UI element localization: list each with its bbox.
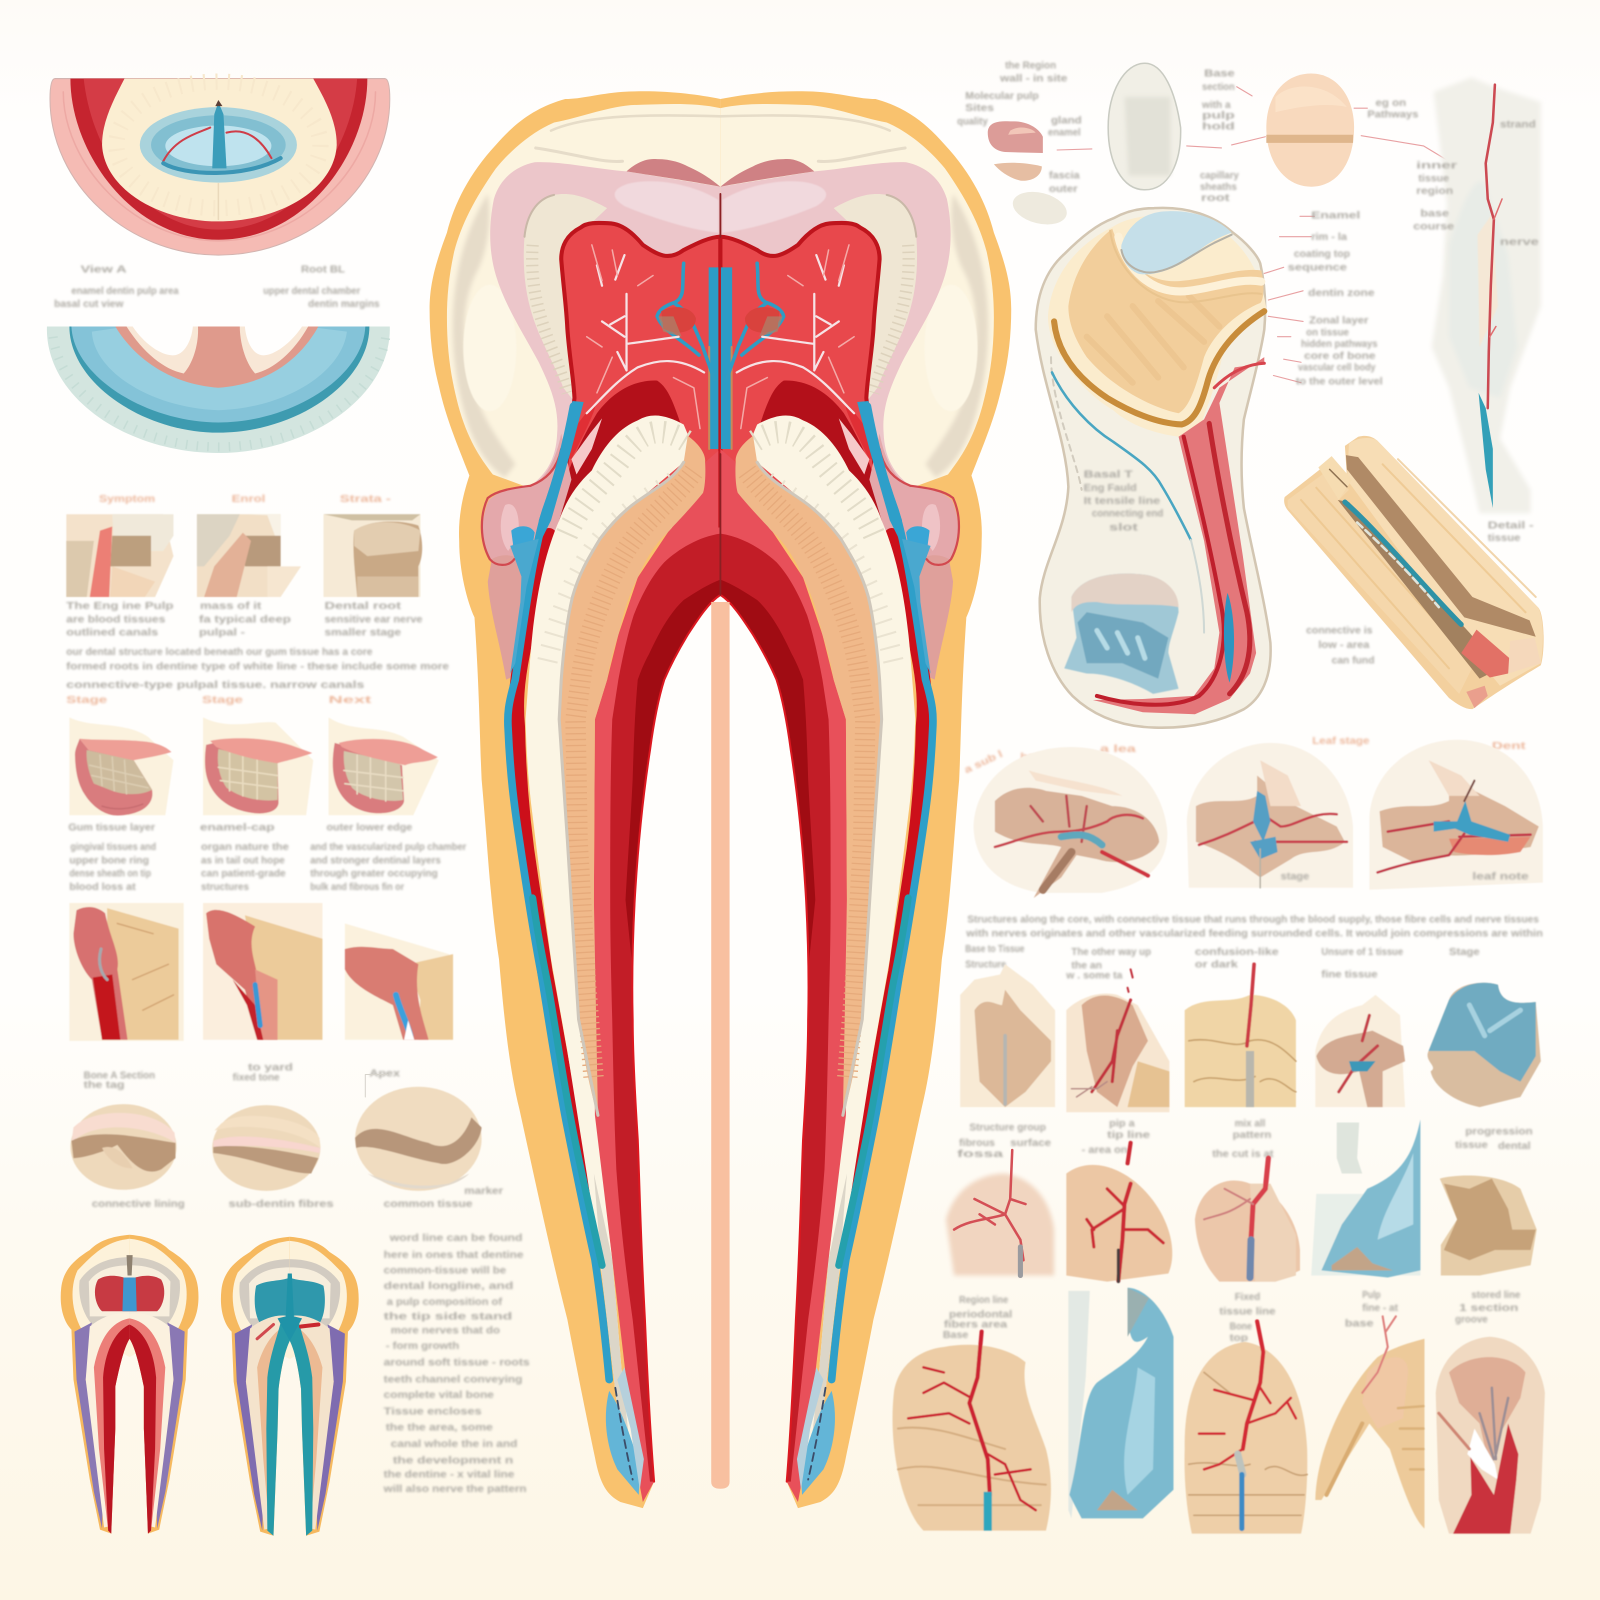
captions: connective lining <box>92 1199 185 1210</box>
panel: tissue row two: dental <box>1498 1141 1531 1152</box>
text block: mid-right paragraph <box>965 914 1543 940</box>
panel: tissue row one: the an <box>1071 960 1102 971</box>
tile 2 blue <box>1068 1288 1173 1518</box>
panel: tissue row three: groove <box>1455 1314 1488 1325</box>
panel: tissue row three: fine - at <box>1362 1303 1399 1314</box>
small labels: Base to Tissue <box>965 944 1025 955</box>
panel: gum and teeth row: as in tail out hope <box>201 855 285 866</box>
pale oval <box>1009 187 1070 230</box>
tile 3 <box>1185 964 1296 1107</box>
caption labels between half-bowls: upper dental chamber <box>263 286 360 297</box>
slab label <box>1306 626 1375 666</box>
text block: lower-left column: a pulp composition of <box>387 1297 503 1308</box>
panel: tissue row one: The other way up <box>1071 947 1151 958</box>
panel: tissue sample row: are blood tissues <box>66 614 165 625</box>
text block: lower-left column: here in ones that dentine <box>384 1250 524 1261</box>
text block: lower-left column: dental longline, and <box>384 1281 513 1292</box>
panel: upper half-bowl cross section <box>50 79 390 255</box>
tile 2 <box>1066 969 1169 1112</box>
text block: lower-left column: - form growth <box>386 1341 459 1352</box>
small labels: Region line <box>959 1295 1009 1306</box>
bone callout lines and labels <box>1264 210 1383 388</box>
panel: large bone section: slot <box>1109 523 1139 534</box>
slab label: connective is <box>1306 626 1372 637</box>
panel: tissue row two: pattern <box>1233 1130 1272 1141</box>
panel: small top-right specimens: sheaths <box>1200 182 1237 193</box>
mouth captions: Gum tissue layer <box>68 823 155 834</box>
panel: large bone section: It tensile line <box>1084 496 1161 507</box>
panel: small top-right specimens: Molecular pulp <box>965 91 1039 102</box>
bone callout lines and labels: to the outer level <box>1296 377 1383 388</box>
cap: ochre band <box>1054 311 1264 424</box>
panel: tissue sample row: our dental structure located beneath our gum tissue has a core <box>66 647 373 658</box>
panel: gum and teeth row: Next <box>329 695 373 706</box>
blue pulp oval <box>140 107 297 183</box>
bone callout lines and labels: core of bone <box>1304 351 1376 362</box>
panel: tissue sample row: pulpal - <box>199 628 245 639</box>
panel: large bone section <box>1036 208 1271 728</box>
panel: long vessel strip: region <box>1416 186 1453 197</box>
panel: long vessel strip: base <box>1420 208 1450 219</box>
panel: tissue sample row: smaller stage <box>324 628 402 639</box>
text block: lower-left column: the development n <box>393 1455 513 1466</box>
small tooth: teal pulp version <box>221 1237 359 1536</box>
panel: small top-right specimens: hold <box>1202 122 1235 133</box>
organ 3 note: leaf note <box>1472 872 1529 883</box>
panel: root section samples <box>69 903 453 1041</box>
panel: tissue row three: periodontal <box>949 1309 1012 1320</box>
blue line <box>1052 372 1191 540</box>
text block: lower-left column: the dentine - x vital line <box>384 1470 515 1481</box>
panel: tissue row one: Structure <box>965 959 1007 970</box>
panel: long vessel strip: strand <box>1500 120 1536 131</box>
panel: tissue sample row: connective-type pulpal tissue. narrow canals <box>66 680 364 691</box>
panel: small top-right specimens: fascia <box>1049 171 1080 182</box>
organ 2 note: stage <box>1281 872 1310 883</box>
panel: circular tissue cuts: to yard <box>248 1062 293 1073</box>
caption labels between half-bowls: View A <box>81 264 127 275</box>
panel: small top-right specimens: capillary <box>1200 171 1239 182</box>
caption labels between half-bowls: basal cut view <box>54 299 124 310</box>
tan circle <box>1266 73 1354 187</box>
section 2 <box>203 903 322 1040</box>
circle 2 <box>212 1105 320 1191</box>
organ 3 <box>1369 740 1543 890</box>
panel: lower half-bowl cross section <box>47 327 390 453</box>
panel: tissue row three: tissue line <box>1219 1306 1276 1317</box>
panel: wooden root slab <box>1284 436 1544 709</box>
panel: gum and teeth row: blood loss at <box>69 882 137 893</box>
text block: mid-right paragraph: Structures along the core, with connective tissue that runs through the blood supply, those fibre cells and nerve tissues <box>967 914 1539 925</box>
panel: three organ diagrams <box>963 736 1543 898</box>
cream dentin <box>102 79 337 221</box>
panel: small top-right specimens: root <box>1201 193 1231 204</box>
circle 1 <box>70 1104 177 1190</box>
text block: lower-left column <box>382 1233 530 1495</box>
tile 4 <box>1315 995 1405 1107</box>
tile 1 <box>893 1332 1051 1531</box>
panel: three organ diagrams: a lea <box>1100 744 1136 755</box>
tan pad <box>994 163 1042 181</box>
cap: outer cream <box>1048 215 1266 437</box>
labels: Stage <box>66 695 108 706</box>
panel: small top-right specimens: pulp <box>1202 110 1235 121</box>
sample B <box>197 514 301 597</box>
channel with blue vessel <box>1338 500 1500 679</box>
mouth 2 <box>203 717 313 815</box>
organ 2 <box>1187 743 1353 888</box>
panel: tissue row three <box>893 1288 1545 1534</box>
panel: gum and teeth row: gingival tissues and <box>70 842 156 853</box>
caption labels between half-bowls: dentin margins <box>308 299 380 310</box>
pointer lines <box>1057 87 1449 161</box>
panel: gum and teeth row: Stage <box>202 695 243 706</box>
panel: tissue row one: Unsure of 1 tissue <box>1321 947 1404 958</box>
caption labels between half-bowls: enamel dentin pulp area <box>71 286 179 297</box>
panel: small top-right specimens: with a <box>1201 100 1231 111</box>
sample captions: The Eng ine Pulp <box>66 601 174 612</box>
bone callout lines and labels: Zonal layer <box>1309 315 1369 326</box>
slab label: can fund <box>1332 655 1375 666</box>
labels: Bone A Section <box>84 1071 155 1082</box>
panel: tissue sample row: sensitive ear nerve <box>324 614 423 625</box>
text block: mid-right paragraph: with nerves originates and other vascularized feeding surrounded cells. It would join compressions are within <box>965 929 1543 940</box>
panel: tissue row three: Pulp <box>1362 1290 1381 1301</box>
panel: tissue row one: confusion-like <box>1195 947 1279 958</box>
panel: gum and teeth row: and the vascularized pulp chamber <box>310 842 467 853</box>
white dips <box>133 327 193 355</box>
panel: circular tissue cuts: Apex <box>369 1069 401 1080</box>
red layer <box>70 79 367 240</box>
panel: gum and teeth row: outer lower edge <box>327 823 413 834</box>
text block: lower-left column: common-tissue will be <box>384 1265 507 1276</box>
circle 3 <box>355 1087 482 1191</box>
pink inner shell <box>115 327 318 388</box>
label inside bone: Basal T <box>1084 470 1133 481</box>
panel: tissue row three: top <box>1230 1333 1248 1344</box>
blue block <box>1064 574 1179 694</box>
bone outline <box>1036 208 1271 728</box>
outer pink layer <box>50 79 390 255</box>
panel: tissue row two: tissue <box>1455 1140 1488 1151</box>
panel: small top-right specimens: section <box>1202 82 1235 93</box>
heading labels: Symptom <box>99 494 155 505</box>
sample A <box>66 514 173 597</box>
text block: lower-left column: the the area, some <box>386 1423 494 1434</box>
slab body <box>1284 436 1544 709</box>
panel: long vessel strip: tissue <box>1488 533 1521 544</box>
small tooth: red pulp version <box>61 1235 198 1534</box>
central line <box>719 194 721 595</box>
panel: tissue sample row: mass of it <box>200 601 262 612</box>
red vessel <box>1486 85 1495 408</box>
panel: tissue sample row: outlined canals <box>66 628 158 639</box>
panel: circular tissue cuts: marker <box>464 1186 503 1197</box>
section 3 <box>345 923 453 1040</box>
tile 1 <box>960 964 1055 1107</box>
panel: tissue row three: stored line <box>1471 1290 1521 1301</box>
panel: tissue row one: fine tissue <box>1321 970 1378 981</box>
panel: long vessel strip <box>1413 78 1541 544</box>
panel: small top-right specimens: wall - in site <box>999 74 1068 85</box>
panel: tissue row two <box>946 1119 1537 1282</box>
panel: long vessel strip: course <box>1413 222 1455 233</box>
mouth 3 <box>329 717 439 815</box>
panel: tissue row two: - area on <box>1082 1145 1128 1156</box>
bone callout lines and labels: dentin zone <box>1308 288 1375 299</box>
panel: tissue sample row: formed roots in dentine type of white line - these include some more <box>66 661 450 672</box>
panel: tissue row one <box>960 944 1541 1112</box>
panel: tissue row one: or dark <box>1195 959 1239 970</box>
panel: small top-right specimens: eg on <box>1376 98 1406 109</box>
panel: tissue row three: Fixed <box>1235 1292 1260 1303</box>
text block: lower-left column: around soft tissue - roots <box>384 1357 530 1368</box>
panel: tissue row three: base <box>1345 1319 1374 1330</box>
panel: tissue row one: w . some ta <box>1065 971 1123 982</box>
text block: lower-left column: complete vital bone <box>384 1390 495 1401</box>
red vessels <box>1093 357 1264 714</box>
tile 5 <box>1436 1337 1545 1534</box>
panel: circular tissue cuts: common tissue <box>384 1199 473 1210</box>
slab label: low - area <box>1318 640 1370 651</box>
labels: a sub l <box>963 749 1005 776</box>
panel: tissue sample row: Strata - <box>340 494 391 505</box>
panel: small top-right specimens: outer <box>1049 184 1078 195</box>
tile 4 blue <box>1311 1119 1420 1278</box>
panel: tissue sample row: Enrol <box>232 494 266 505</box>
bone callout lines and labels: sequence <box>1288 262 1348 273</box>
panel: three organ diagrams: Leaf stage <box>1312 736 1370 747</box>
main tooth: longitudinal section <box>430 91 1011 1508</box>
text block: lower-left column: teeth channel conveying <box>384 1375 523 1386</box>
brown edge <box>1346 455 1536 637</box>
panel: long vessel strip: tissue <box>1418 174 1450 185</box>
panel: tissue row two: pip a <box>1109 1119 1135 1130</box>
bone callout lines and labels: hidden pathways <box>1301 339 1378 350</box>
panel: tissue row two: the cut is at <box>1212 1149 1274 1160</box>
right half <box>720 91 1011 1508</box>
caption labels between half-bowls: Root BL <box>301 264 345 275</box>
panel: small top-right specimens: gland <box>1051 115 1082 126</box>
panel: circular tissue cuts: the tag <box>84 1080 125 1091</box>
text block: lower-left column: the tip side stand <box>384 1311 512 1322</box>
panel: gum and teeth row: through greater occupying <box>310 869 438 880</box>
left half <box>430 91 720 1508</box>
panel: tissue row two: surface <box>1010 1138 1052 1149</box>
panel: large bone section: Eng Fauld <box>1084 483 1137 494</box>
panel: gum and teeth row: structures <box>201 882 249 893</box>
small labels: Structure group <box>969 1123 1046 1134</box>
panel: gum and teeth row: upper bone ring <box>69 855 149 866</box>
panel: tissue row one: Stage <box>1449 947 1480 958</box>
panel: small top-right specimens: Sites <box>965 103 994 114</box>
panel: tissue row two: fossa <box>957 1149 1004 1160</box>
panel: small top-right specimens: quality <box>957 116 988 127</box>
panel: large bone section: connecting end <box>1092 508 1163 519</box>
panel: gum and teeth row <box>66 695 467 893</box>
text block: lower-left column: will also nerve the pattern <box>382 1484 527 1495</box>
panel: gum and teeth row: dense sheath on tip <box>69 869 151 880</box>
panel: small top-right specimens <box>957 60 1449 230</box>
blue cap <box>1121 211 1232 274</box>
panel: tissue row two: tip line <box>1107 1130 1151 1141</box>
panel: tissue sample row: fa typical deep <box>199 614 291 625</box>
cream pockets <box>127 327 198 373</box>
caption labels between half-bowls <box>54 264 380 310</box>
specimen labels: the Region <box>1005 60 1056 71</box>
bone callout lines and labels: coating top <box>1294 249 1350 260</box>
pink pad <box>988 121 1043 153</box>
panel: three organ diagrams: Dent <box>1492 741 1526 752</box>
bone callout lines and labels: on tissue <box>1306 328 1350 339</box>
text block: lower-left column: more nerves that do <box>391 1326 500 1337</box>
panel: gum and teeth row: can patient-grade <box>201 869 286 880</box>
text block: lower-left column: Tissue encloses <box>384 1406 482 1417</box>
text block: lower-left column: canal whole the in and <box>391 1439 517 1450</box>
organ 1 <box>973 747 1167 898</box>
tile 5 tan <box>1440 1176 1537 1276</box>
panel: gum and teeth row: bulk and fibrous fin or <box>310 882 404 893</box>
blue vessel <box>1479 393 1493 508</box>
panel: tissue sample row: Dental root <box>324 601 402 612</box>
mouth 1 <box>69 717 173 815</box>
panel: tissue row three: 1 section <box>1459 1303 1518 1314</box>
tile 4 <box>1315 1316 1424 1529</box>
panel: gum and teeth row: organ nature the <box>201 842 289 853</box>
panel: tissue row two: fibrous <box>959 1138 995 1149</box>
tile 5 <box>1428 983 1541 1107</box>
bone callout lines and labels: rim - la <box>1311 232 1348 243</box>
text block: lower-left column: word line can be found <box>389 1233 523 1244</box>
bone callout lines and labels: vascular cell body <box>1298 362 1376 373</box>
panel: tissue row three: Bone <box>1230 1322 1253 1333</box>
panel: small top-right specimens: enamel <box>1048 128 1081 139</box>
panel: tissue row three: fibers area <box>944 1320 1008 1331</box>
panel: circular tissue cuts: sub-dentin fibres <box>229 1199 334 1210</box>
panel: circular tissue cuts <box>70 1062 503 1210</box>
panel: tissue row two: mix all <box>1235 1119 1265 1130</box>
strip labels: inner <box>1416 160 1458 171</box>
panel: long vessel strip: Detail - <box>1488 521 1534 532</box>
tile 2 <box>1066 1143 1172 1282</box>
pale egg <box>1108 63 1181 190</box>
section 1 <box>69 903 184 1041</box>
sample C <box>323 514 422 597</box>
panel: tissue sample row <box>66 494 450 691</box>
panel: gum and teeth row: enamel-cap <box>200 823 275 834</box>
tile 3 <box>1195 1158 1300 1282</box>
panel: small top-right specimens: Base <box>1204 69 1235 80</box>
panel: tissue row three: Base <box>943 1330 969 1341</box>
panel: circular tissue cuts: fixed tone <box>233 1073 280 1084</box>
panel: three organ diagrams: bar <box>1020 752 1039 763</box>
bone callout lines and labels: Enamel <box>1311 210 1360 221</box>
panel: gum and teeth row: and stronger dentinal layers <box>310 855 441 866</box>
panel: tissue row two: progression <box>1465 1127 1533 1138</box>
tile 3 <box>1184 1321 1307 1534</box>
tile 1 <box>946 1150 1054 1276</box>
red tip <box>1461 630 1515 678</box>
cap: tan interior <box>1068 229 1264 413</box>
central post <box>711 602 730 1489</box>
panel: long vessel strip: nerve <box>1500 237 1540 248</box>
panel: small top-right specimens: Pathways <box>1367 109 1418 120</box>
